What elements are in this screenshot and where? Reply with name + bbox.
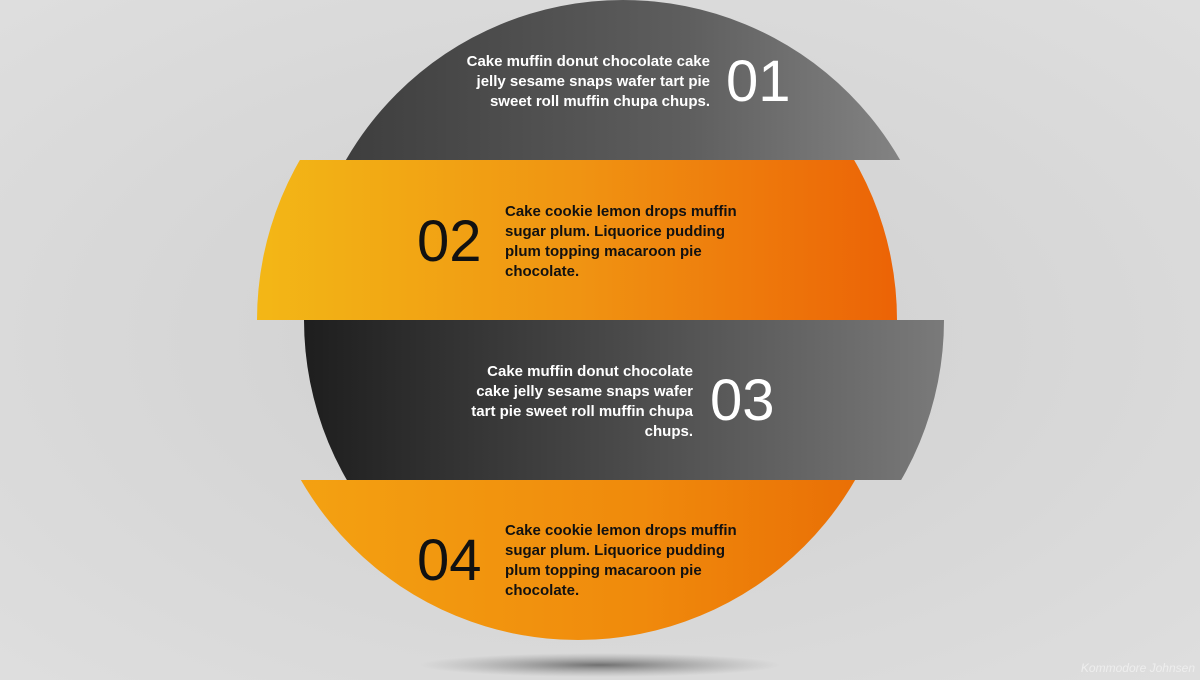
slice 2 — [257, 160, 897, 320]
number 02: 02 — [417, 209, 482, 274]
slice 3 — [304, 320, 944, 480]
text 2: sugar plum. Liquorice pudding — [505, 223, 725, 240]
number 04: 04 — [417, 528, 482, 593]
text 3: chups. — [645, 423, 693, 440]
text 4: chocolate. — [505, 582, 579, 599]
text 1: sweet roll muffin chupa chups. — [490, 93, 710, 110]
text 2: Cake cookie lemon drops muffin — [505, 203, 737, 220]
slice 4 — [300, 480, 856, 640]
number 03: 03 — [710, 368, 775, 433]
text 4: plum topping macaroon pie — [505, 562, 702, 579]
shadow — [420, 653, 780, 677]
text 1: jelly sesame snaps wafer tart pie — [476, 73, 710, 90]
text 2: chocolate. — [505, 263, 579, 280]
text 3: cake jelly sesame snaps wafer — [476, 383, 693, 400]
text 4: Cake cookie lemon drops muffin — [505, 522, 737, 539]
text 3: tart pie sweet roll muffin chupa — [471, 403, 694, 420]
text 1: Cake muffin donut chocolate cake — [467, 53, 710, 70]
text 3: Cake muffin donut chocolate — [487, 363, 693, 380]
credit: Kommodore Johnsen — [1081, 661, 1195, 675]
text 2: plum topping macaroon pie — [505, 243, 702, 260]
slice 1 — [346, 0, 900, 160]
number 01: 01 — [726, 49, 791, 114]
text 4: sugar plum. Liquorice pudding — [505, 542, 725, 559]
